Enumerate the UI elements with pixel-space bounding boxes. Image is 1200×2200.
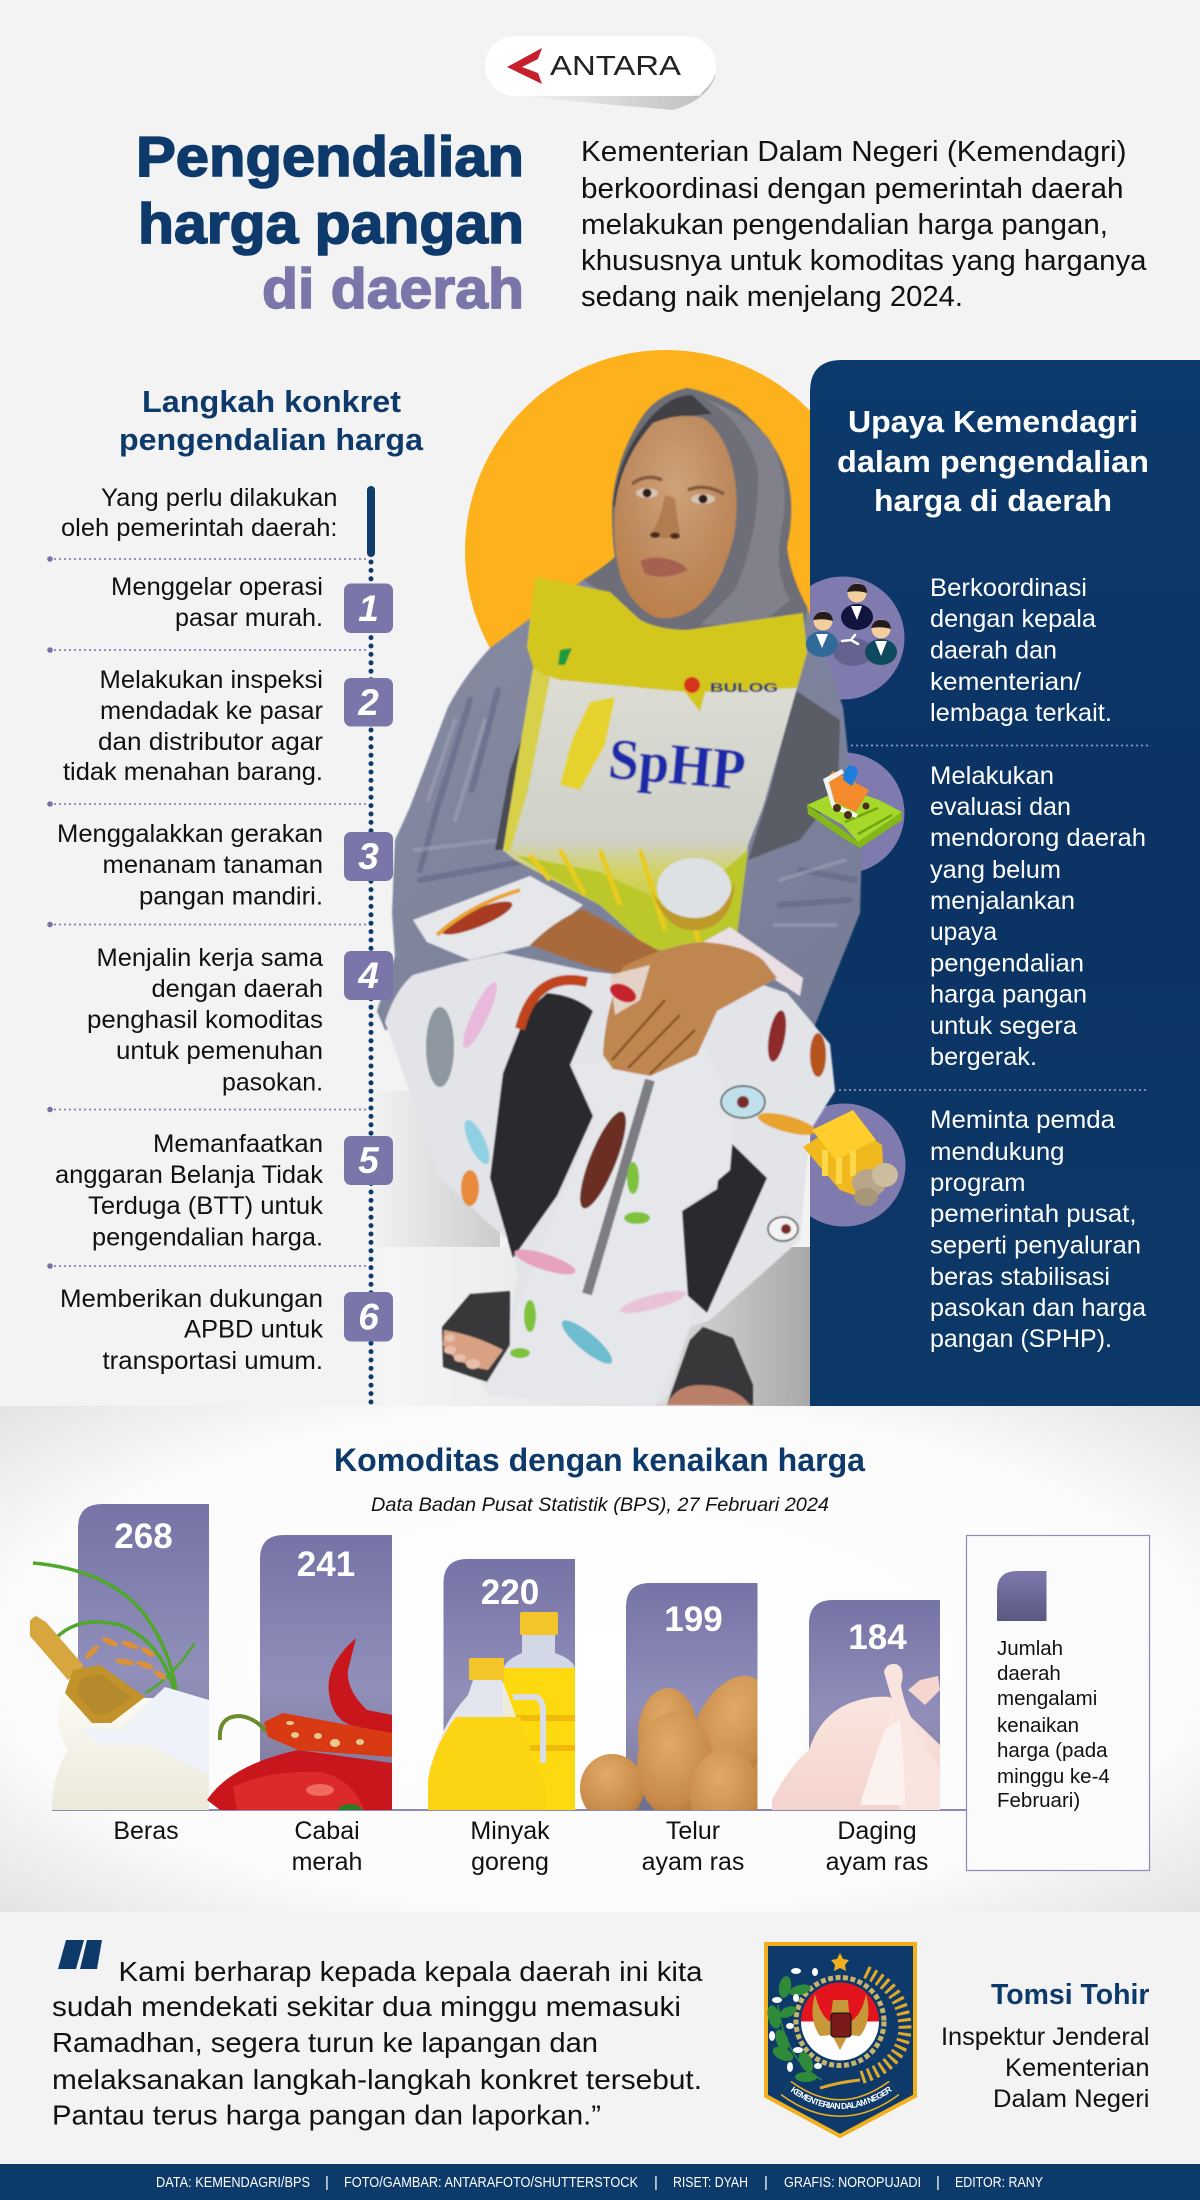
quote attribution: Tomsi Tohir <box>991 1979 1150 2011</box>
chart category labels: ayam ras <box>642 1848 744 1876</box>
intro paragraph: Kementerian Dalam Negeri (Kemendagri) <box>581 136 1126 168</box>
chart category labels: Minyak <box>470 1817 550 1845</box>
chart category labels: Beras <box>113 1817 179 1845</box>
heading: Langkah konkret <box>119 384 424 457</box>
legend text: mengalami <box>997 1687 1097 1710</box>
chart subtitle: Data Badan Pusat Statistik (BPS), 27 Februari 2024 <box>371 1494 829 1516</box>
illustration: raw chicken <box>772 1664 940 1810</box>
quote attribution: Kementerian <box>1005 2054 1150 2082</box>
bar: Daging ayam ras 184: 184 <box>848 1618 907 1657</box>
chart category labels: Cabai <box>294 1817 360 1845</box>
intro paragraph <box>581 136 1147 313</box>
chart category labels <box>113 1817 928 1876</box>
icon: shopping cart on green steps <box>807 765 902 848</box>
panel item 3 text: pangan (SPHP). <box>930 1325 1112 1353</box>
step 6: transportasi umum. <box>102 1347 323 1375</box>
panel item 2 text: Melakukan <box>930 762 1054 790</box>
title: Pengendalian <box>136 125 524 189</box>
chart category labels: Daging <box>837 1817 917 1845</box>
panel item 1 text: Berkoordinasi <box>930 574 1087 602</box>
icon discs <box>810 576 906 1226</box>
legend text <box>997 1637 1110 1812</box>
bar: Minyak goreng 220: 220 <box>481 1573 539 1612</box>
step 2: dan distributor agar <box>98 728 323 756</box>
step 3 <box>57 820 393 910</box>
step 2: tidak menahan barang. <box>63 758 323 786</box>
orange circle behind portrait <box>465 350 867 752</box>
heading: Upaya Kemendagri <box>837 404 1149 518</box>
step 4: untuk pemenuhan <box>116 1037 323 1065</box>
panel item 1 text: daerah dan <box>930 636 1057 664</box>
step 3: menanam tanaman <box>102 851 323 879</box>
chart category labels: merah <box>292 1848 362 1876</box>
legend text: harga (pada <box>997 1739 1108 1762</box>
footer credits: | <box>764 2174 768 2191</box>
emblem: Kementerian Dalam Negeri <box>764 1942 917 2138</box>
step 2: mendadak ke pasar <box>100 697 323 725</box>
step 5: Memanfaatkan <box>153 1130 323 1158</box>
legend text: kenaikan <box>997 1714 1079 1737</box>
quote attribution: Inspektur Jenderal <box>941 2023 1150 2051</box>
floor shadow behind portrait <box>370 1091 810 1406</box>
panel item 2 text: upaya <box>930 918 997 946</box>
panel item 3 text: beras stabilisasi <box>930 1263 1110 1291</box>
face <box>614 416 737 618</box>
illustration: two oil bottles <box>428 1612 575 1810</box>
legend text: minggu ke-4 <box>997 1765 1110 1788</box>
footer credits: | <box>325 2174 329 2191</box>
step 5: 5 <box>358 1140 380 1181</box>
panel item 1 text: lembaga terkait. <box>930 699 1112 727</box>
timeline dotted line <box>368 562 374 1406</box>
sleeve cuffs <box>413 876 583 960</box>
step 6: 6 <box>358 1296 379 1338</box>
footer credits <box>0 2164 1200 2200</box>
footer credits: FOTO/GAMBAR: ANTARAFOTO/SHUTTERSTOCK <box>344 2174 638 2191</box>
panel item 2 text <box>930 762 1146 1071</box>
step 4: Menjalin kerja sama <box>96 944 323 972</box>
quote attribution <box>941 1979 1150 2113</box>
panel item 3 text: Meminta pemda <box>930 1106 1115 1134</box>
portrait: woman holding SPHP rice bag <box>377 388 862 1407</box>
panel item 2 text: harga pangan <box>930 980 1087 1008</box>
footer credits: | <box>936 2174 940 2191</box>
chart category labels: goreng <box>471 1848 549 1876</box>
footer credits: | <box>654 2174 658 2191</box>
panel item 2 text: evaluasi dan <box>930 793 1071 821</box>
icon: gold bank with rocks <box>803 1110 898 1206</box>
skirt <box>385 953 835 1407</box>
skirt print <box>426 979 826 1369</box>
title: harga pangan <box>138 192 524 256</box>
sandals and feet <box>442 1291 753 1405</box>
panel: Upaya Kemendagri background <box>810 360 1200 1406</box>
step 1: Menggelar operasi <box>111 573 323 601</box>
heading: Upaya Kemendagri: harga di daerah <box>874 483 1112 518</box>
list dividers <box>47 556 367 1269</box>
step 1: 1 <box>358 588 379 629</box>
panel item 2 text: pengendalian <box>930 950 1084 978</box>
rice bag yellow top <box>527 577 807 712</box>
legend swatch <box>997 1571 1046 1621</box>
bar: Beras 268 <box>28 1504 209 1810</box>
logo: ANTARA <box>485 36 716 110</box>
quote text <box>52 1956 703 2130</box>
quote text: melaksanakan langkah-langkah konkret tersebut. <box>52 2064 702 2095</box>
hijab <box>583 388 807 640</box>
dark inner garment <box>748 690 840 860</box>
panel item 1 text: kementerian/ <box>930 668 1081 696</box>
portrait: woman holding SPHP rice bag: SpHP <box>606 726 748 802</box>
chart legend box <box>966 1536 1150 1870</box>
footer credits: GRAFIS: NOROPUJADI <box>784 2174 921 2191</box>
logo: ANTARA: ANTARA <box>550 50 681 81</box>
facial features <box>632 477 724 577</box>
quote mark <box>58 1940 102 1969</box>
step 4: penghasil komoditas <box>87 1006 323 1034</box>
step 5 <box>55 1130 393 1252</box>
panel item 2 text: bergerak. <box>930 1043 1037 1071</box>
panel item 3 text: program <box>930 1169 1026 1197</box>
panel item 3 text: pasokan dan harga <box>930 1294 1146 1322</box>
panel item 2 text: untuk segera <box>930 1012 1077 1040</box>
illustration: eggs <box>580 1676 758 1810</box>
bar: Telur ayam ras 199: 199 <box>664 1600 723 1639</box>
illustration: red chillies <box>207 1638 392 1816</box>
chart category labels: ayam ras <box>826 1848 928 1876</box>
skirt front folds <box>480 1040 735 1407</box>
quote text: sudah mendekati sekitar dua minggu memasuki <box>52 1991 681 2022</box>
heading: Langkah konkret: Langkah konkret <box>142 384 401 419</box>
chart baseline <box>52 1809 966 1811</box>
title <box>136 125 524 321</box>
bar: Daging ayam ras 184 <box>772 1600 940 1810</box>
intro paragraph: berkoordinasi dengan pemerintah daerah <box>581 173 1124 205</box>
bar: Telur ayam ras 199 <box>580 1583 758 1810</box>
list intro text: Yang perlu dilakukan <box>101 484 338 512</box>
icon: three officials <box>806 584 897 666</box>
sleeve folds <box>415 690 855 925</box>
step 4 <box>87 944 393 1096</box>
list intro text: oleh pemerintah daerah: <box>61 514 338 542</box>
intro paragraph: sedang naik menjelang 2024. <box>581 281 963 313</box>
panel item 1 text <box>930 574 1112 727</box>
step 4: 4 <box>357 955 379 996</box>
step 2 <box>63 666 393 786</box>
black legs <box>490 993 593 1258</box>
chart category labels: Telur <box>666 1817 720 1845</box>
panel item 3 text: pemerintah pusat, <box>930 1200 1136 1228</box>
panel item 3 text: mendukung <box>930 1138 1064 1166</box>
intro paragraph: khususnya untuk komoditas yang harganya <box>581 245 1147 277</box>
footer credits: EDITOR: RANY <box>955 2174 1043 2191</box>
bar: Beras 268: 268 <box>114 1517 173 1556</box>
step 6: APBD untuk <box>184 1316 324 1344</box>
step 1: pasar murah. <box>175 604 323 632</box>
panel item 3 text <box>930 1106 1146 1353</box>
rice bag lower body <box>503 676 797 950</box>
legend text: daerah <box>997 1662 1061 1685</box>
title: di daerah <box>262 257 524 321</box>
step 1 <box>111 573 393 633</box>
bar: Minyak goreng 220 <box>428 1559 575 1810</box>
legend text: Jumlah <box>997 1637 1063 1660</box>
legend text: Februari) <box>997 1789 1080 1812</box>
arms and hands <box>530 909 663 975</box>
footer credits: RISET: DYAH <box>673 2174 748 2191</box>
panel: chart section background <box>0 1406 1200 1912</box>
quote text: Pantau terus harga pangan dan laporkan.” <box>52 2100 601 2130</box>
body and sleeves <box>377 580 862 1030</box>
emblem: Kementerian Dalam Negeri: KEMENTERIAN DALAM NEGERI <box>790 2086 892 2109</box>
panel item 2 text: yang belum <box>930 856 1061 884</box>
panel item 2 text: mendorong daerah <box>930 824 1146 852</box>
step 3: Menggalakkan gerakan <box>57 820 323 848</box>
step 2: Melakukan inspeksi <box>100 666 323 694</box>
step 4: dengan daerah <box>152 975 323 1003</box>
step 5: Terduga (BTT) untuk <box>88 1192 324 1220</box>
bag labels: BULOG <box>710 680 778 695</box>
timeline top bar <box>367 486 375 557</box>
heading: Langkah konkret: pengendalian harga <box>119 422 424 457</box>
illustration: rice sack and scoop <box>28 1563 209 1810</box>
panel item 3 text: seperti penyaluran <box>930 1232 1141 1260</box>
quote text: Ramadhan, segera turun ke lapangan dan <box>52 2027 598 2058</box>
step 6: Memberikan dukungan <box>60 1285 323 1313</box>
rice illustration on bag <box>515 697 748 950</box>
intro paragraph: melakukan pengendalian harga pangan, <box>581 209 1108 241</box>
step 2: 2 <box>357 682 379 723</box>
panel item 1 text: dengan kepala <box>930 605 1096 633</box>
list intro text <box>61 484 338 542</box>
step 3: 3 <box>358 836 379 877</box>
panel dividers <box>840 746 1150 1090</box>
chart title: Komoditas dengan kenaikan harga <box>334 1442 865 1478</box>
heading: Upaya Kemendagri: Upaya Kemendagri <box>848 404 1138 439</box>
bar: Cabai merah 241: 241 <box>297 1545 355 1584</box>
step 5: anggaran Belanja Tidak <box>55 1161 324 1189</box>
bar: Cabai merah 241 <box>207 1535 392 1816</box>
step 6 <box>60 1285 393 1375</box>
quote attribution: Dalam Negeri <box>993 2085 1150 2113</box>
step 3: pangan mandiri. <box>139 882 323 910</box>
quote text: Kami berharap kepada kepala daerah ini kita <box>118 1956 703 1987</box>
step 4: pasokan. <box>222 1068 323 1096</box>
step 5: pengendalian harga. <box>92 1224 323 1252</box>
footer credits: DATA: KEMENDAGRI/BPS <box>156 2174 310 2191</box>
heading: Upaya Kemendagri: dalam pengendalian <box>837 444 1149 479</box>
panel item 2 text: menjalankan <box>930 887 1075 915</box>
